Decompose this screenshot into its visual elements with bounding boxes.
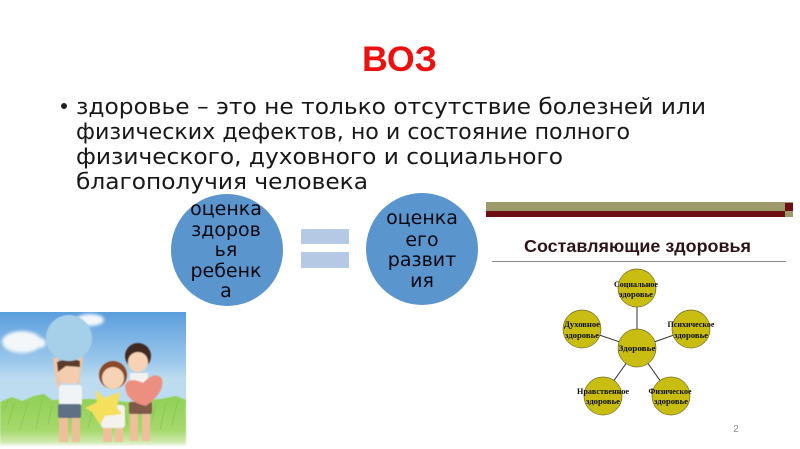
diagram: components of health: здоровье [619,290,653,299]
diagram: components of health: Социальное [614,280,658,289]
circle: child health assessment: оценка [190,198,262,220]
diagram: components of health: Физическое [648,387,692,396]
diagram: components of health: Духовное [564,320,600,329]
circle: child health assessment: ребенк [190,260,262,282]
grass [0,394,186,446]
diagram: components of health [563,269,715,415]
diagram: components of health: здоровье [565,331,599,340]
text block: definition of health: здоровье – это не только отсутствие болезней или [76,94,706,120]
circle: child health assessment: ья [215,239,237,261]
diagram: components of health: Психическое [668,320,715,329]
circle: development assessment [366,193,478,305]
diagram: components of health: Здоровье [618,344,656,353]
slide header bar [486,202,793,217]
title: ВОЗ [362,40,437,79]
circle: child health assessment: здоров [191,219,261,241]
page number: 2 [733,424,739,435]
picture: children on a meadow [0,312,186,446]
circle: development assessment: ия [410,270,434,292]
circle: development assessment: оценка [386,207,458,229]
equals sign [301,229,349,268]
child with blue balloon [46,315,92,442]
circle: child health assessment: а [220,280,232,302]
clouds [2,314,104,353]
heading: components of health: Составляющие здоровья [524,236,751,256]
circle: development assessment: развит [388,249,456,271]
diagram: components of health: Нравственное [577,387,629,396]
text block: definition of health: благополучия человека [76,169,368,195]
circle: child health assessment [171,194,283,306]
circle: development assessment: его [405,229,439,251]
text block: definition of health: физических дефектов, но и состояние полного [76,119,630,145]
child with yellow star [85,361,127,442]
diagram: components of health: здоровье [586,397,620,406]
text block: definition of health [61,94,706,195]
text block: definition of health: физического, духовного и социального [76,144,563,170]
diagram: components of health: здоровье [654,397,688,406]
bullet [61,103,67,109]
child with red heart [125,343,162,441]
diagram: components of health: здоровье [674,331,708,340]
